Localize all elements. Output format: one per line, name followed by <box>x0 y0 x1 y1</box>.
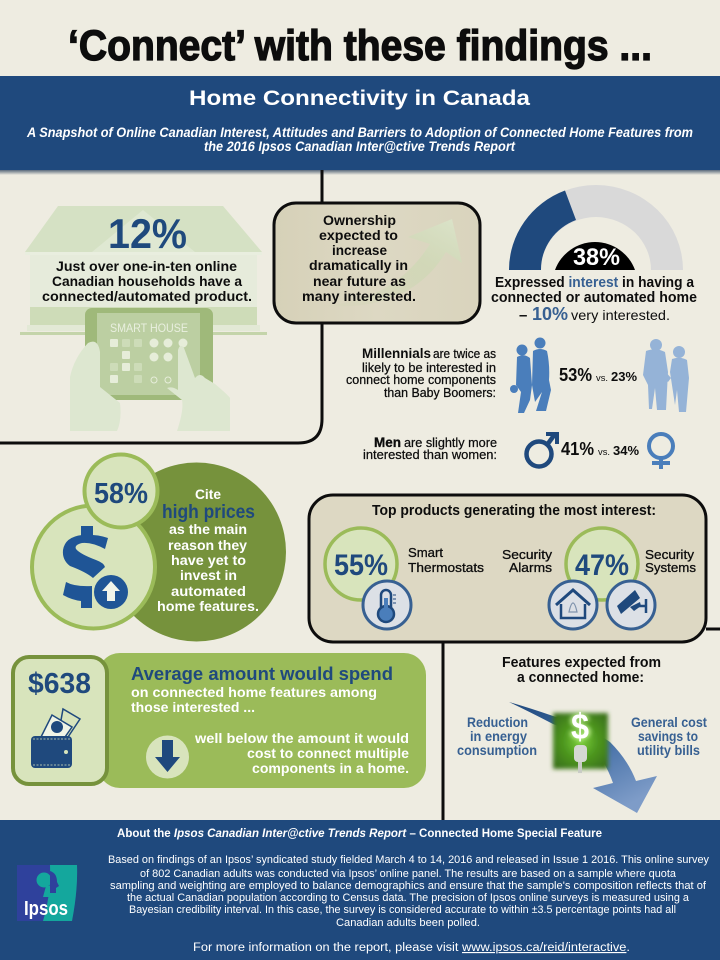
panel heading: Features expected from <box>502 654 661 671</box>
gender text: Men <box>374 435 401 450</box>
icon: male symbol <box>526 434 557 466</box>
icon: energy bulb with dollar sign: $ <box>569 706 591 747</box>
ownership text: near future as <box>313 273 406 289</box>
stat description: Just over one-in-ten online <box>56 258 237 274</box>
icon: hands <box>70 342 230 431</box>
gender text: are slightly more <box>404 435 497 450</box>
logo: Ipsos <box>17 865 77 921</box>
panel: $638 average spend: those interested ... <box>131 700 255 715</box>
product: smart thermostats: Smart <box>408 545 443 560</box>
interest text <box>491 275 697 324</box>
gender text: interested than women: <box>363 447 497 462</box>
icon: energy bulb with dollar sign <box>553 706 608 773</box>
footer link line: For more information on the report, please visit www.ipsos.ca/reid/interactive . <box>193 942 630 954</box>
icon: tablet: SMART HOUSE <box>110 321 188 335</box>
panel: ownership expected to increase <box>274 203 480 323</box>
feature: general cost savings: General cost <box>631 714 707 730</box>
stat: 58%: 58% <box>94 478 148 510</box>
product: smart thermostats: 55% <box>334 549 388 582</box>
feature: general cost savings: savings to <box>638 728 698 744</box>
panel: millennials vs boomers <box>346 338 689 413</box>
footer panel <box>0 820 720 960</box>
interest text: very interested. <box>571 307 670 323</box>
comparison: 41% vs 34%: vs. <box>598 447 610 458</box>
panel: $638 average spend <box>13 653 426 788</box>
survey methodology text: the actual Canadian population according to Census data. The precision of Ipsos online surveys is measured using a <box>127 892 690 904</box>
ownership text: expected to <box>319 227 398 243</box>
feature: general cost savings <box>631 714 707 758</box>
icon: thermometer <box>363 581 411 629</box>
panel: 12% households <box>20 206 267 431</box>
panel: $638 average spend: cost to connect multiple <box>247 746 410 761</box>
stat: $638: $638 <box>28 668 91 700</box>
comparison: 53% vs 23% <box>559 365 637 385</box>
high prices text: high prices <box>162 502 255 523</box>
panel heading: Top products generating the most interest: <box>372 502 656 519</box>
product: security alarms and systems <box>502 528 697 629</box>
icon: energy bulb with dollar sign: $ <box>571 706 589 747</box>
icon: wallet <box>31 709 80 768</box>
millennials text: Millennials <box>362 346 431 361</box>
stat description: connected/automated product. <box>42 288 252 304</box>
gender text <box>363 435 497 462</box>
survey methodology text: Canadian adults been polled. <box>336 917 480 929</box>
interest text: – <box>519 307 527 324</box>
gauge chart: 38% <box>573 244 620 271</box>
panel: $638 average spend: components in a home. <box>252 761 409 776</box>
banner subtitle: A Snapshot of Online Canadian Interest, Attitudes and Barriers to Adoption of Connected Home Features from <box>26 125 693 140</box>
icon: female symbol <box>649 434 673 469</box>
panel heading <box>502 654 661 686</box>
feature: general cost savings: utility bills <box>637 742 700 758</box>
icon: boomer couple <box>643 339 689 412</box>
icon: security camera <box>607 581 655 629</box>
survey methodology text: Bayesian credibility interval. In this case, the survey is considered accurate to within ±3.5 percentage points had all <box>129 904 676 916</box>
stat: 12%: 12% <box>108 210 187 257</box>
comparison: 41% vs 34% <box>561 439 639 459</box>
product: security alarms and systems: Security <box>502 547 553 562</box>
panel heading: a connected home: <box>517 669 644 686</box>
average spend text: Average amount would spend <box>131 664 393 684</box>
product: smart thermostats <box>325 528 485 629</box>
gauge chart <box>509 185 683 271</box>
header banner <box>0 76 720 175</box>
comparison: 41% vs 34%: 41% <box>561 439 594 459</box>
logo: Ipsos: Ipsos <box>24 898 68 920</box>
feature: reduction in energy: in energy <box>470 728 527 744</box>
feature: reduction in energy <box>457 714 537 758</box>
high prices text: reason they <box>168 537 247 553</box>
interest text: Expressed interest in having a <box>495 275 695 291</box>
product: security alarms and systems: Systems <box>645 560 697 575</box>
millennials text: than Baby Boomers: <box>384 386 496 400</box>
icon: millennial couple <box>510 338 551 413</box>
product: security alarms and systems: Alarms <box>509 560 553 575</box>
survey methodology text: of 802 Canadian adults was conducted via Ipsos’ online panel. The results are based on a sample where quota <box>140 868 677 880</box>
high prices text: as the main <box>169 521 247 537</box>
product: security alarms and systems: 47% <box>575 549 629 582</box>
stat description <box>42 258 252 304</box>
ownership text: many interested. <box>302 288 416 304</box>
high prices text <box>157 486 259 614</box>
survey methodology text <box>108 854 709 929</box>
high prices text: Cite <box>195 486 221 502</box>
ownership text <box>302 212 416 304</box>
icon: house <box>20 206 267 335</box>
ownership text: increase <box>332 242 387 258</box>
millennials text: likely to be interested in <box>362 361 496 375</box>
high prices text: have yet to <box>171 552 246 568</box>
high prices text: home features. <box>157 598 259 614</box>
panel: men vs women <box>363 434 673 469</box>
banner heading: Home Connectivity in Canada <box>189 87 530 110</box>
comparison: 53% vs 23%: vs. <box>596 373 608 384</box>
millennials text <box>346 346 496 400</box>
millennials text: are twice as <box>433 347 496 361</box>
ownership text: Ownership <box>323 212 396 228</box>
comparison: 53% vs 23%: 23% <box>611 369 637 384</box>
panel: $638 average spend: on connected home features among <box>131 685 377 700</box>
panel: high prices <box>32 454 286 642</box>
icon: rising arrow <box>323 219 462 307</box>
panel: $638 average spend: well below the amount it would <box>194 731 409 746</box>
survey methodology text: Based on findings of an Ipsos’ syndicated study fielded March 4 to 14, 2016 and released in Issue 1 2016. This online survey <box>108 854 709 866</box>
banner subtitle <box>26 125 693 154</box>
icon: tablet <box>85 308 213 400</box>
icon: down arrow <box>146 736 189 778</box>
comparison: 53% vs 23%: 53% <box>559 365 592 385</box>
interest text: 10% <box>532 304 568 324</box>
feature: reduction in energy: consumption <box>457 742 537 758</box>
product: smart thermostats: Thermostats <box>408 560 485 575</box>
footer heading: About the Ipsos Canadian Inter@ctive Trends Report – Connected Home Special Feature <box>117 828 602 840</box>
survey methodology text: sampling and weighting are employed to balance demographics and ensure that the sample's composition reflects that of <box>110 880 707 892</box>
millennials text: connect home components <box>346 373 496 387</box>
interest text: connected or automated home <box>491 290 697 306</box>
high prices text: invest in <box>180 567 237 583</box>
feature: reduction in energy: Reduction <box>467 714 528 730</box>
icon: house alarm <box>549 581 597 629</box>
title: ‘Connect’ with these findings ... <box>68 22 652 70</box>
icon: dollar sign with up arrow <box>63 526 130 611</box>
panel: top products <box>309 495 706 642</box>
high prices text: automated <box>171 583 246 599</box>
panel: 38% interest <box>491 185 697 324</box>
ownership text: dramatically in <box>309 257 408 273</box>
comparison: 41% vs 34%: 34% <box>613 443 639 458</box>
banner subtitle: the 2016 Ipsos Canadian Inter@ctive Trends Report <box>204 139 515 154</box>
icon: curved arrow <box>509 702 657 813</box>
product: security alarms and systems: Security <box>645 547 695 562</box>
stat description: Canadian households have a <box>52 273 242 289</box>
panel: features expected <box>457 654 707 813</box>
